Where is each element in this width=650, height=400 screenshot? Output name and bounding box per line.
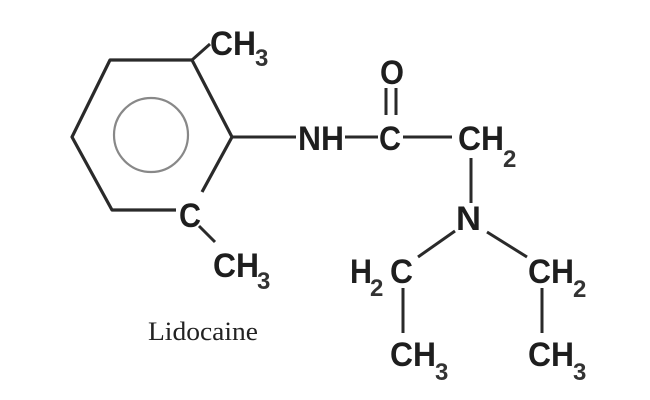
atom label: right CH2 xyxy=(528,253,586,303)
atom label: carbonyl C: C xyxy=(379,120,401,158)
atom label: left CH3: 3 xyxy=(435,359,448,386)
atom label: ring C: C xyxy=(179,197,201,235)
atom label: H2C: H xyxy=(350,253,372,291)
atom label: right CH2: 2 xyxy=(573,276,586,303)
atom label: top CH3 xyxy=(210,25,268,72)
atom label: bottom CH3: 3 xyxy=(257,268,270,295)
atom label: left CH3 xyxy=(390,336,448,386)
atom label: right CH2: CH xyxy=(528,253,574,291)
caption: Lidocaine xyxy=(148,317,258,346)
atom label: H2C: C xyxy=(390,253,413,291)
benzene ring xyxy=(72,60,232,210)
atom label: right CH3: 3 xyxy=(573,359,586,386)
atom label: CH2 xyxy=(458,120,516,173)
atom label: H2C: 2 xyxy=(370,275,383,302)
atom label: H2C xyxy=(350,253,413,302)
atom label: right CH3: CH xyxy=(528,336,574,374)
atom label: N: N xyxy=(456,200,481,238)
atom label: top CH3: CH xyxy=(210,25,256,63)
atom label: left CH3: CH xyxy=(390,336,436,374)
atom label: bottom CH3 xyxy=(213,247,270,295)
bonds xyxy=(192,44,542,333)
atom label: right CH3 xyxy=(528,336,586,386)
atom label: CH2: 2 xyxy=(503,146,516,173)
atom label: NH: NH xyxy=(298,120,344,158)
atom label: CH2: CH xyxy=(458,120,504,158)
atom label: top CH3: 3 xyxy=(255,45,268,72)
atom label: bottom CH3: CH xyxy=(213,247,259,285)
atom label: O: O xyxy=(380,54,404,92)
